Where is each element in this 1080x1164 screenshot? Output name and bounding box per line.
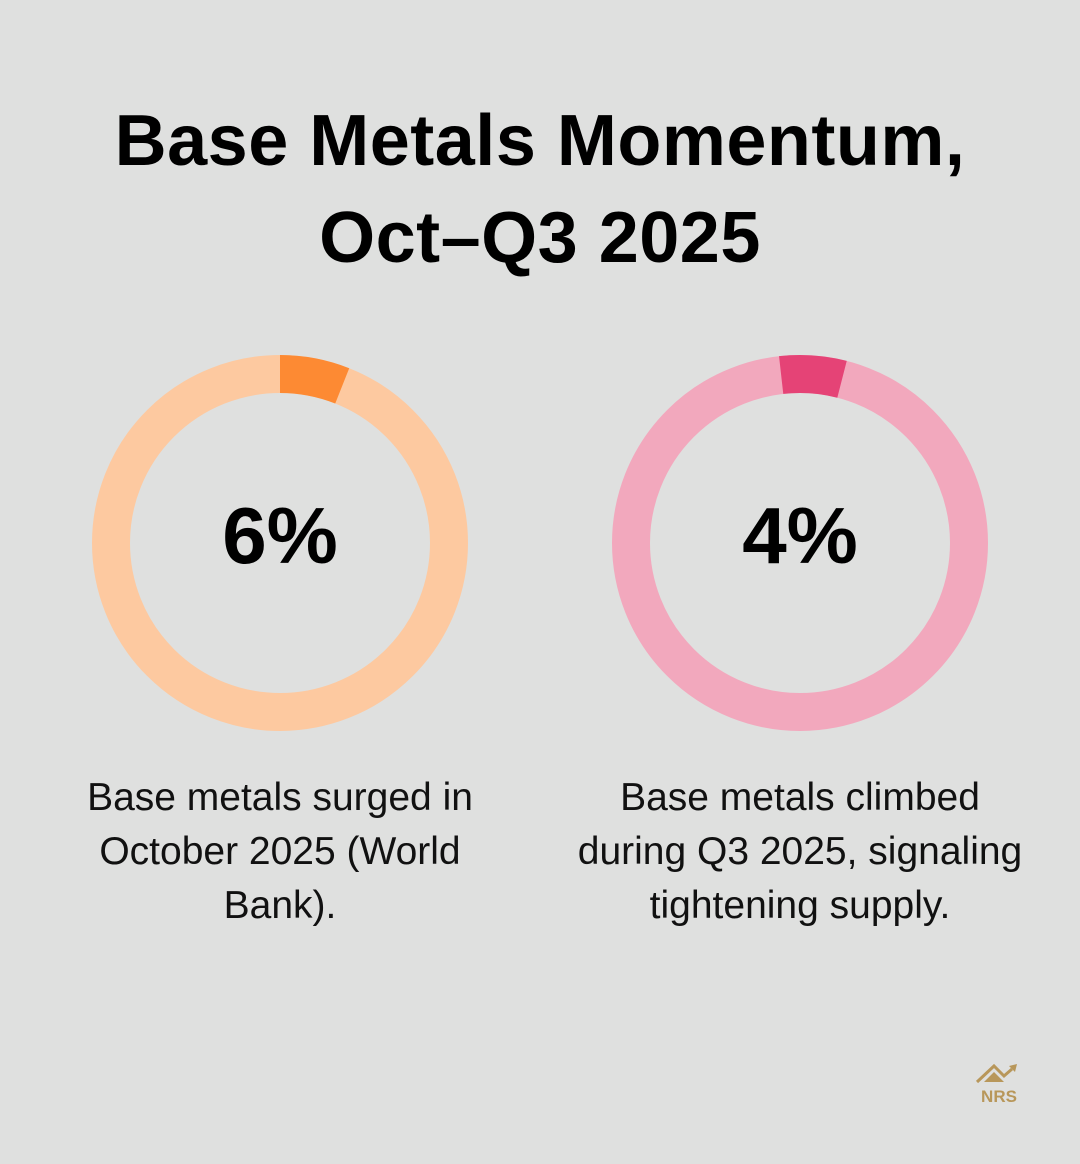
title: Oct–Q3 2025 (319, 198, 761, 278)
caption left: October 2025 (World (99, 830, 461, 873)
caption right: Base metals climbed (620, 776, 980, 819)
caption left: Bank). (224, 884, 336, 927)
caption left (87, 776, 473, 927)
caption right: tightening supply. (650, 884, 950, 927)
caption right: during Q3 2025, signaling (578, 830, 1022, 873)
value 6%: 6% (222, 491, 338, 580)
ring right (631, 374, 969, 712)
ring left (111, 374, 449, 712)
logo: NRS (976, 1064, 1017, 1106)
caption left: Base metals surged in (87, 776, 473, 819)
value 4%: 4% (742, 491, 858, 580)
caption right (578, 776, 1022, 927)
title (115, 101, 965, 278)
logo: NRS: NRS (981, 1087, 1017, 1106)
title: Base Metals Momentum, (115, 101, 965, 181)
